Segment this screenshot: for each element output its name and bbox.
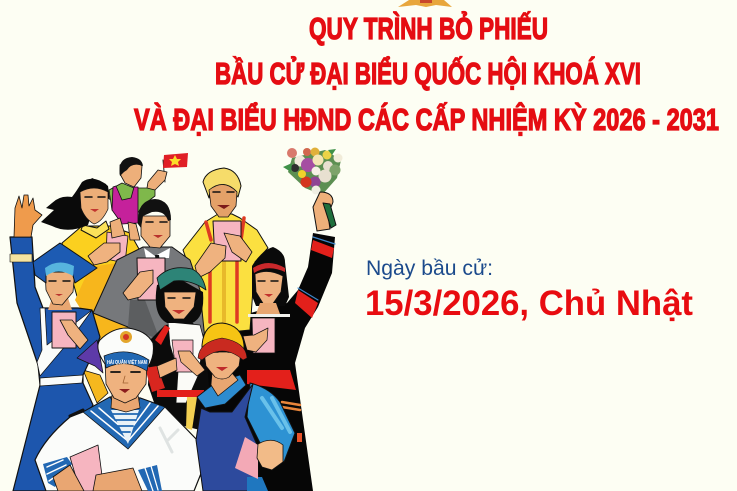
hand holding bouquet [313,192,333,231]
book [106,232,128,263]
neck [256,303,280,314]
turban [203,168,241,198]
book [172,340,193,372]
collar [248,314,290,317]
neck and face [211,373,238,396]
election date: 15/3/2026, Chủ Nhật [365,284,693,323]
striped shirt [111,410,139,444]
figure: child with flag [109,153,188,240]
book [52,312,76,348]
illustration: group of voters [10,148,342,491]
book [137,258,165,300]
overalls [196,384,258,491]
collar stripes [83,397,165,449]
hair [41,179,110,230]
figure: man in turban and yellow tunic [183,168,268,335]
ballot book [70,445,104,491]
hands [53,465,142,491]
shirt collar [197,375,246,408]
gown [10,237,100,491]
figure: woman in teal hat and white blouse [145,268,210,430]
hand raised [14,195,42,237]
figure: navy sailor [35,328,204,491]
face [209,184,237,217]
hand on book [60,320,88,349]
sailor uniform [35,397,204,491]
mortarboard cap [33,243,97,283]
icon: flower bouquet [283,148,342,195]
figure: worker in yellow helmet [196,323,295,491]
title [134,10,719,137]
hand [243,328,268,352]
face [255,271,283,305]
ballot paper [235,437,258,479]
figure: woman in black ethnic dress, back layer [200,148,342,491]
sleeve stripes [43,457,72,487]
naval cap: HẢI QUÂN VIỆT NAM [107,358,147,366]
neck and face [48,298,72,310]
figure: woman in black headdress holding book [243,247,290,353]
figure: man in grey suit [93,199,205,345]
book [252,318,275,353]
hands [157,351,205,378]
figure: woman in graduation gown with raised hand [10,195,108,491]
headdress [252,247,289,306]
book [213,221,241,261]
flag [163,153,188,182]
hands [195,243,226,278]
white collar and sash [37,308,92,376]
blue sleeve [247,383,295,462]
hand [123,270,153,300]
hand [88,243,120,265]
neck and face [111,395,140,412]
fabric shadow [160,428,178,452]
face [141,216,170,248]
teal hat [157,268,206,290]
yellow skirt behind [83,370,108,403]
helmet [202,323,244,352]
hair [156,278,203,323]
face [80,188,108,224]
naval cap [98,328,153,371]
figure: woman in yellow ao dai [41,178,143,345]
epaulette [70,410,83,416]
fist [257,440,283,470]
belt [40,375,83,386]
face [164,292,196,319]
election date label: Ngày bầu cử: [366,257,493,280]
title: QUY TRÌNH BỎ PHIẾU [309,10,548,46]
icon: national emblem cropped at top [398,0,452,7]
